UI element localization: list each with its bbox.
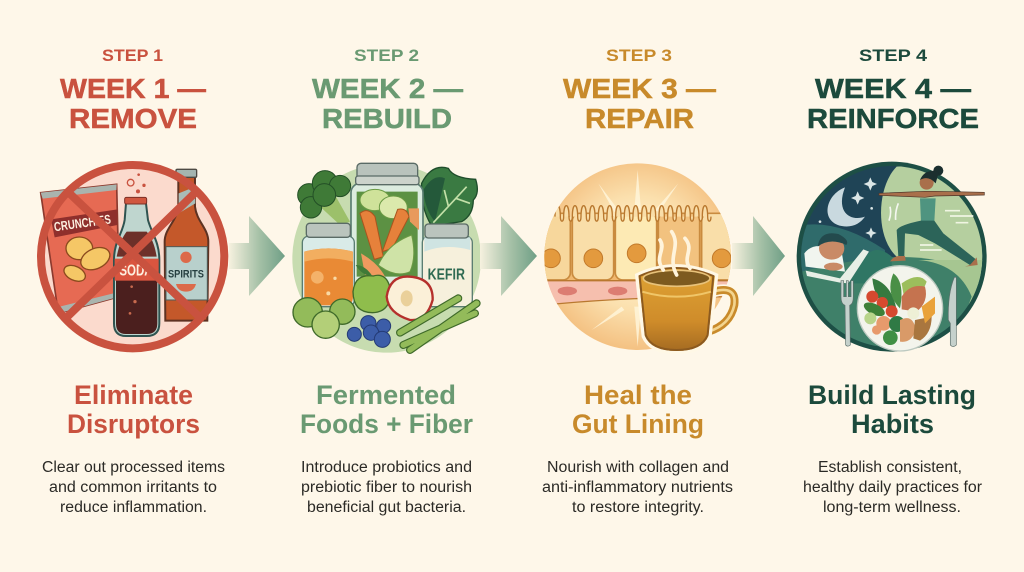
icon: healing gut lining with broth — [538, 163, 738, 353]
panel: step 2 — [292, 46, 481, 516]
icon: steaming cup — [637, 232, 735, 353]
gut lining cells — [538, 206, 738, 304]
text block: step 4 description: long-term wellness. — [823, 499, 961, 516]
arrow: step 1 to 2 — [229, 216, 285, 296]
icon: moon and stars — [819, 177, 877, 239]
text block: step 4 description — [803, 459, 982, 516]
icon: knife — [948, 277, 956, 346]
icon: chips bag: CRUNCHIES — [53, 211, 112, 234]
icon: blueberries — [347, 316, 391, 347]
subheading: heal the gut lining: Gut Lining — [572, 409, 704, 439]
subheading: fermented foods + fiber: Foods + Fiber — [300, 409, 473, 439]
text block: step 2 description — [301, 459, 472, 516]
text block: step 3 description: to restore integrity. — [572, 499, 704, 516]
heading: week 4 reinforce — [807, 73, 979, 134]
icon: fork — [841, 281, 853, 346]
icon: apple half — [387, 277, 433, 320]
heading: week 2 rebuild: REBUILD — [322, 103, 452, 134]
icon: glowing circle — [544, 163, 731, 350]
text block: step 1 description: and common irritants to — [49, 479, 217, 496]
heading: week 3 repair — [563, 73, 716, 134]
icon: sleeping person in bed — [804, 233, 892, 283]
text block: step 1 description: Clear out processed items — [42, 459, 225, 476]
icon: soda bottle — [114, 173, 159, 336]
heading: step 2 label: STEP 2 — [354, 46, 419, 65]
panel: step 3 — [538, 46, 738, 516]
arrow: step 2 to 3 — [480, 216, 537, 296]
icon: kale — [421, 167, 477, 226]
icon: kefir jar: KEFIR — [428, 266, 465, 283]
subheading: build lasting habits — [808, 380, 976, 439]
subheading: build lasting habits: Habits — [851, 409, 934, 439]
heading: week 1 remove: WEEK 1 — — [60, 73, 206, 104]
subheading: eliminate disruptors — [67, 380, 200, 439]
icon: crossed out junk food — [41, 165, 224, 348]
icon: soda bottle: SODA — [119, 262, 153, 279]
text block: step 2 description: Introduce probiotics and — [301, 459, 472, 476]
icon: lasting habits — [795, 160, 995, 353]
heading: week 4 reinforce: WEEK 4 — — [815, 73, 971, 104]
panel: step 4 — [795, 46, 995, 516]
subheading: fermented foods + fiber: Fermented — [316, 380, 456, 410]
text block: step 3 description: Nourish with collagen and — [547, 459, 729, 476]
heading: week 1 remove — [60, 73, 206, 134]
text block: step 1 description: reduce inflammation. — [60, 499, 207, 516]
subheading: fermented foods + fiber — [300, 380, 473, 439]
subheading: eliminate disruptors: Disruptors — [67, 409, 200, 439]
icon: chips bag — [41, 184, 119, 313]
heading: week 2 rebuild — [312, 73, 463, 134]
text block: step 2 description: beneficial gut bacteria. — [307, 499, 466, 516]
text block: step 2 description: prebiotic fiber to nourish — [301, 479, 472, 496]
heading: week 3 repair: WEEK 3 — — [563, 73, 716, 104]
icon: fermented foods and fiber — [292, 163, 481, 353]
heading: step 1 label: STEP 1 — [102, 46, 163, 65]
icon: asparagus — [400, 298, 477, 350]
text block: step 4 description: Establish consistent, — [818, 459, 962, 476]
subheading: eliminate disruptors: Eliminate — [74, 380, 193, 410]
heading: week 3 repair: REPAIR — [585, 103, 694, 134]
text block: step 3 description: anti-inflammatory nutrients — [542, 479, 733, 496]
text block: step 1 description — [42, 459, 225, 516]
heading: step 4 label: STEP 4 — [859, 46, 928, 65]
icon: prohibition sign — [41, 165, 224, 348]
icon: kefir jar — [422, 224, 472, 307]
heading: week 4 reinforce: REINFORCE — [807, 103, 979, 134]
icon: broccoli — [298, 171, 351, 225]
heading: week 2 rebuild: WEEK 2 — — [312, 73, 463, 104]
icon: yoga figure — [879, 166, 984, 267]
icon: large vegetable jar — [351, 163, 423, 290]
heading: step 3 label: STEP 3 — [606, 46, 672, 65]
icon: plate of food — [857, 266, 943, 351]
icon: kombucha jar — [302, 223, 354, 307]
icon: brussels sprouts — [293, 298, 355, 338]
icon: spirits bottle — [165, 169, 208, 321]
arrow: step 3 to 4 — [732, 216, 785, 296]
heading: week 1 remove: REMOVE — [69, 103, 197, 134]
icon: spirits bottle: SPIRITS — [168, 268, 204, 280]
subheading: heal the gut lining: Heal the — [584, 380, 692, 410]
icon: green apple — [353, 265, 391, 313]
text block: step 4 description: healthy daily practices for — [803, 479, 982, 496]
text block: step 3 description — [542, 459, 733, 516]
subheading: build lasting habits: Build Lasting — [808, 380, 976, 410]
scene: night sky, hills — [801, 166, 982, 346]
panel: step 1 — [41, 46, 225, 516]
subheading: heal the gut lining — [572, 380, 704, 439]
